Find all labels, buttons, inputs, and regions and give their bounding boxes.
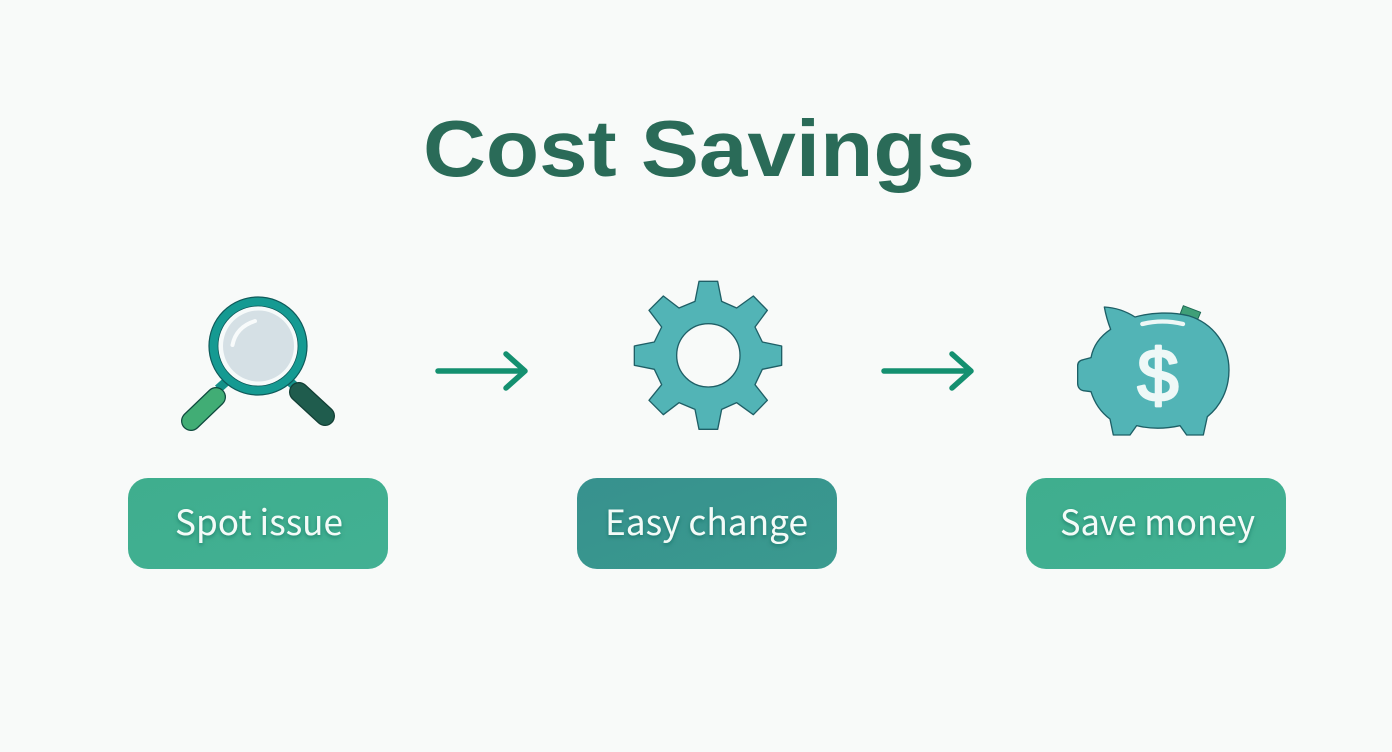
lens glass [223, 310, 294, 382]
coin slot [1142, 321, 1183, 324]
arrow: spot issue to easy change [438, 354, 525, 388]
dollar sign: $ [1137, 334, 1179, 417]
icon: gear [634, 281, 782, 429]
lens highlight [232, 321, 255, 345]
coin [1180, 306, 1201, 321]
arrow: easy change to save money [884, 354, 971, 388]
button: spot issue [128, 478, 388, 569]
button: spot issue: Spot issue [175, 495, 343, 546]
button: easy change [577, 478, 837, 569]
icon: piggy bank [1078, 306, 1229, 435]
button: easy change: Easy change [605, 495, 808, 546]
pig body [1078, 307, 1229, 435]
button: save money [1026, 478, 1286, 569]
lens ring [209, 297, 307, 395]
icon: magnifying glass [191, 297, 325, 421]
right handle [288, 380, 325, 416]
left handle [191, 380, 228, 421]
button: save money: Save money [1060, 495, 1255, 546]
title: Cost Savings [423, 104, 975, 193]
